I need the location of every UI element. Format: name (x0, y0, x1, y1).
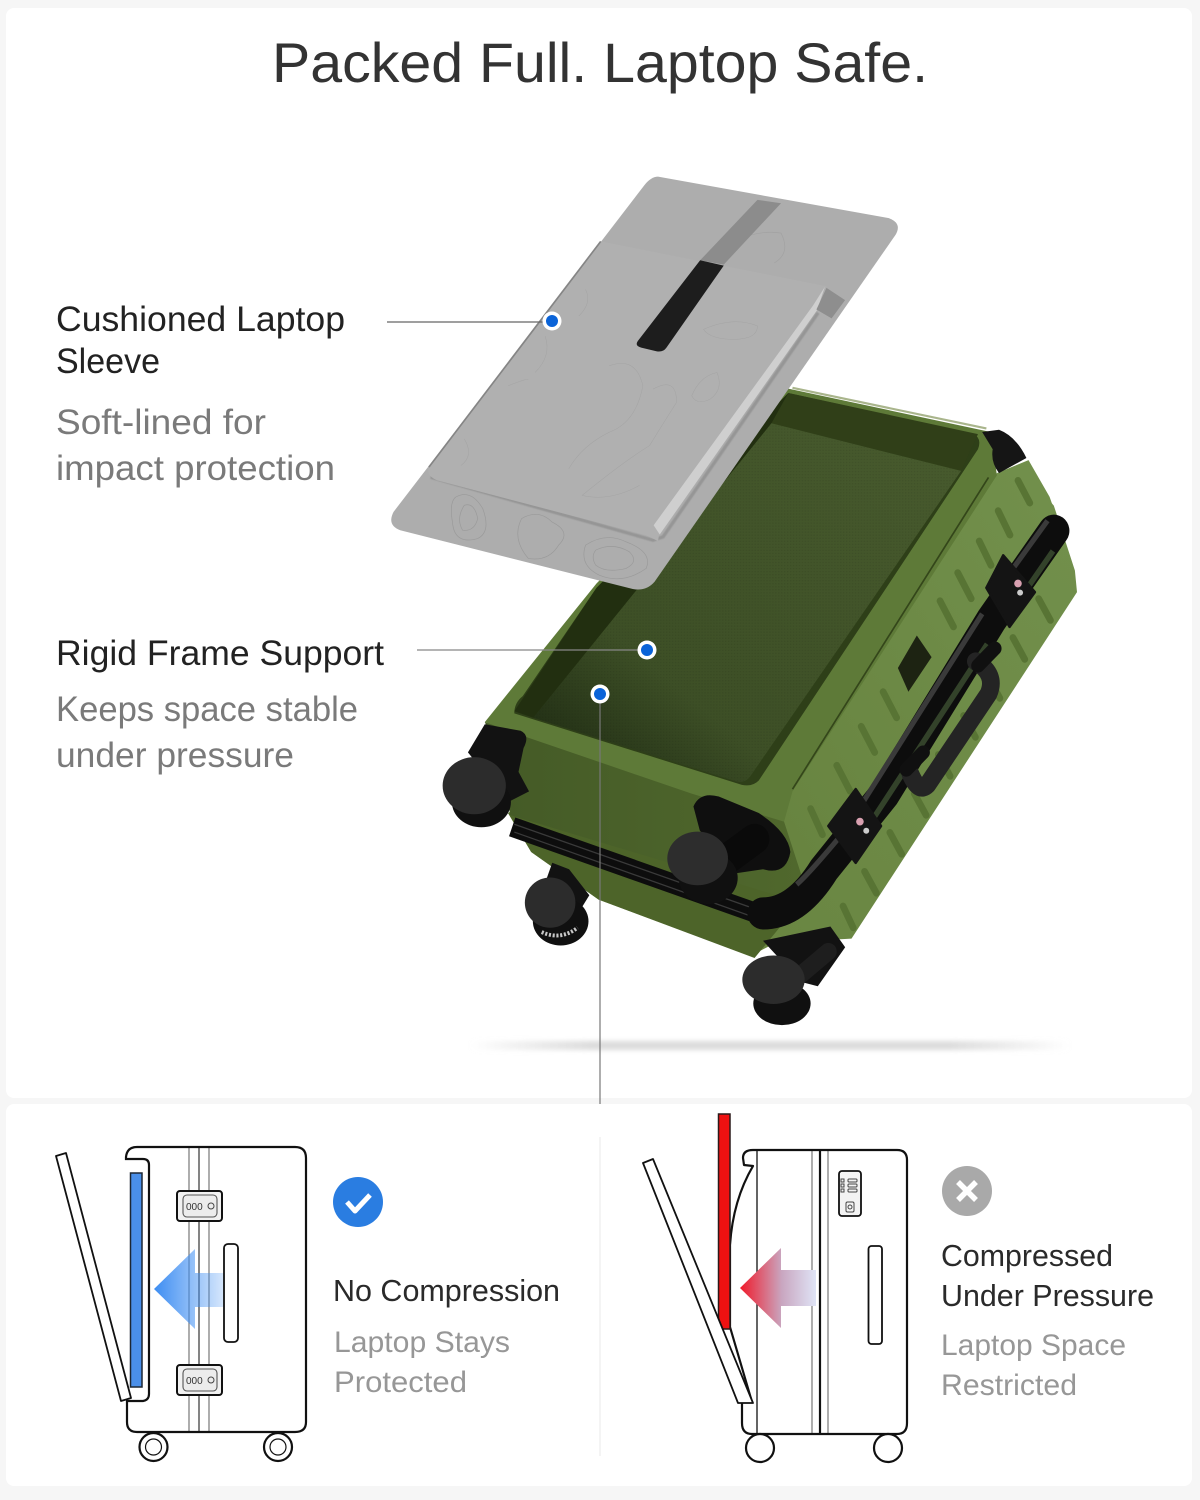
callout line and dot: frame (417, 640, 656, 660)
frame lines (757, 1150, 828, 1434)
back board (391, 177, 898, 590)
body outline (730, 1150, 907, 1434)
callout line and dot: sleeve (387, 312, 562, 330)
lining floor (533, 423, 961, 782)
lock upper (986, 555, 1035, 627)
callout: cushioned laptop sleeve label: Cushioned Laptop (56, 300, 345, 339)
upper shell side face (767, 460, 1058, 887)
panel: hero background (6, 8, 1192, 1098)
callout: rigid frame support label: under pressure (56, 736, 294, 775)
suitcase ground shadow (470, 1041, 1070, 1050)
connector line and dot: down to comparison (590, 684, 610, 1104)
pocket flap shadow (431, 313, 818, 540)
handle (224, 1244, 238, 1342)
callout: rigid frame support label: Rigid Frame Support (56, 634, 384, 673)
arrow red (740, 1248, 816, 1328)
topographic contours lower band (451, 232, 785, 579)
lower shell (508, 467, 1077, 956)
arrow blue (154, 1249, 235, 1329)
callout: cushioned laptop sleeve label: Soft-lined for (56, 403, 266, 442)
text: compressed under pressure: Under Pressure (941, 1278, 1154, 1313)
icon: grey cross (942, 1166, 992, 1216)
pocket left edge (429, 241, 601, 467)
handle (906, 648, 995, 788)
diagram: compressed suitcase side view (643, 1114, 907, 1462)
callout: cushioned laptop sleeve label: Sleeve (56, 342, 160, 381)
logo patch (898, 635, 932, 692)
text: compressed under pressure: Laptop Space (941, 1329, 1126, 1362)
topographic contours on pocket (461, 290, 757, 497)
black aluminium frame, front run (512, 827, 767, 917)
strap black (637, 260, 724, 352)
upper shell front face (485, 722, 805, 897)
black aluminium frame, side run (763, 521, 1054, 913)
text: compressed under pressure: Compressed (941, 1238, 1113, 1273)
illustration: open green suitcase (443, 388, 1077, 1025)
text: no compression: No Compression (333, 1273, 560, 1308)
diagram: protected suitcase side view (56, 1147, 306, 1461)
handle (868, 1246, 882, 1344)
text: compressed under pressure (941, 1238, 1154, 1402)
wheels (746, 1434, 902, 1462)
light rim edge (792, 388, 986, 428)
text: no compression: Laptop Stays (334, 1326, 510, 1359)
wheel: back left (525, 863, 589, 945)
frame lines (189, 1147, 209, 1432)
text: no compression (333, 1273, 560, 1399)
corner guard top (982, 430, 1026, 473)
wheel: back right (742, 926, 845, 1025)
text: compressed under pressure: Restricted (941, 1369, 1077, 1402)
wheel: front right (667, 795, 790, 904)
moulded ribs lower row (843, 599, 1050, 928)
callout: rigid frame support label: Keeps space stable (56, 690, 358, 729)
rim groove (792, 477, 988, 789)
moulded ribs upper row (811, 480, 1030, 835)
divider (599, 1137, 601, 1456)
wheel: front left (443, 724, 529, 827)
lock lower (828, 789, 881, 863)
panel: comparison background (6, 1104, 1192, 1486)
title: Packed Full. Laptop Safe. (272, 31, 928, 94)
opening wall (514, 393, 979, 785)
bottom lock: 000 (186, 1376, 203, 1387)
top lock: 000 (186, 1202, 203, 1213)
text: no compression: Protected (334, 1366, 467, 1399)
strap tab (816, 288, 845, 318)
upper inner wall (771, 393, 978, 471)
icon: blue check (333, 1177, 383, 1227)
red laptop (718, 1114, 730, 1329)
callout: cushioned laptop sleeve label (56, 300, 345, 488)
pocket flap (428, 241, 827, 541)
top lock (177, 1191, 222, 1221)
blue laptop (130, 1173, 142, 1387)
upper shell rim face (485, 389, 997, 822)
wheels (140, 1433, 292, 1461)
open lid (56, 1153, 131, 1401)
grey strap upper (700, 200, 781, 265)
callout: cushioned laptop sleeve label: impact protection (56, 449, 335, 488)
lower front face (508, 813, 788, 958)
pocket light edge (654, 287, 825, 535)
lining texture (533, 423, 961, 782)
illustration: grey laptop sleeve (391, 177, 898, 590)
bottom lock (177, 1365, 222, 1395)
left inner wall (514, 393, 788, 718)
body outline (126, 1147, 306, 1432)
callout: rigid frame support label (56, 634, 384, 775)
combination lock (839, 1171, 861, 1216)
open lid (643, 1159, 753, 1403)
